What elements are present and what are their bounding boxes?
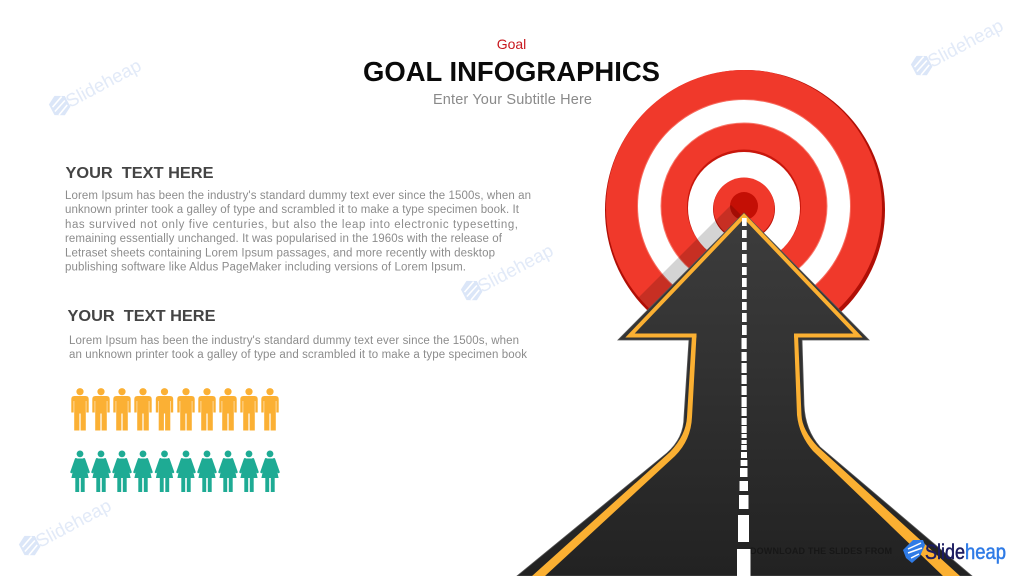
- target icon: [605, 70, 885, 312]
- paragraph 2: an unknown printer took a galley of type and scrambled it to make a type specimen book: [69, 349, 527, 361]
- heading 2: YOUR TEXT HERE: [68, 308, 216, 325]
- heading 1: YOUR TEXT HERE: [66, 165, 214, 182]
- paragraph 2: Lorem Ipsum has been the industry's standard dummy text ever since the 1500s, when: [69, 335, 519, 347]
- pictogram row: men: [71, 388, 279, 430]
- paragraph 1: Letraset sheets containing Lorem Ipsum passages, and more recently with desktop: [65, 248, 495, 260]
- watermark: centre: Slideheap: [474, 239, 557, 297]
- right yellow edge line: [794, 335, 960, 576]
- paragraph 2: [69, 335, 527, 361]
- text block 1: [65, 165, 531, 274]
- paragraph 1: remaining essentially unchanged. It was popularised in the 1960s with the release of: [65, 233, 503, 245]
- paragraph 1: Lorem Ipsum has been the industry's standard dummy text ever since the 1500s, when an: [65, 190, 531, 202]
- paragraph 1: unknown printer took a galley of type and scrambled it to make a type specimen book. It: [65, 204, 520, 216]
- paragraph 1: [65, 190, 531, 274]
- logo wordmark: heap: [965, 541, 1006, 564]
- title: GOAL INFOGRAPHICS: [363, 56, 660, 87]
- text block 2: [68, 308, 527, 361]
- road surface: [517, 213, 972, 576]
- logo wordmark: [925, 541, 1006, 564]
- centre dashes: [737, 218, 750, 576]
- road arrow: [517, 213, 972, 576]
- watermark: bottom left: Slideheap: [32, 494, 115, 552]
- arrow shadow on target: [639, 205, 741, 308]
- watermark: top left: Slideheap: [62, 54, 145, 112]
- subtitle: Enter Your Subtitle Here: [433, 92, 592, 108]
- footer download text: DOWNLOAD THE SLIDES FROM: [750, 546, 892, 556]
- logo icon: [903, 540, 925, 563]
- arrowhead yellow outline: [630, 216, 858, 336]
- paragraph 1: publishing software like Aldus PageMaker including versions of Lorem Ipsum.: [65, 262, 466, 274]
- subtitle label: Goal: [497, 36, 526, 52]
- logo wordmark: Slide: [925, 541, 965, 564]
- pictogram row: women: [71, 450, 279, 492]
- watermark: top right: Slideheap: [924, 14, 1007, 72]
- left yellow edge line: [532, 335, 696, 576]
- paragraph 1: has survived not only five centuries, but also the leap into electronic typesetting,: [65, 219, 518, 231]
- footer logo: [903, 540, 1006, 564]
